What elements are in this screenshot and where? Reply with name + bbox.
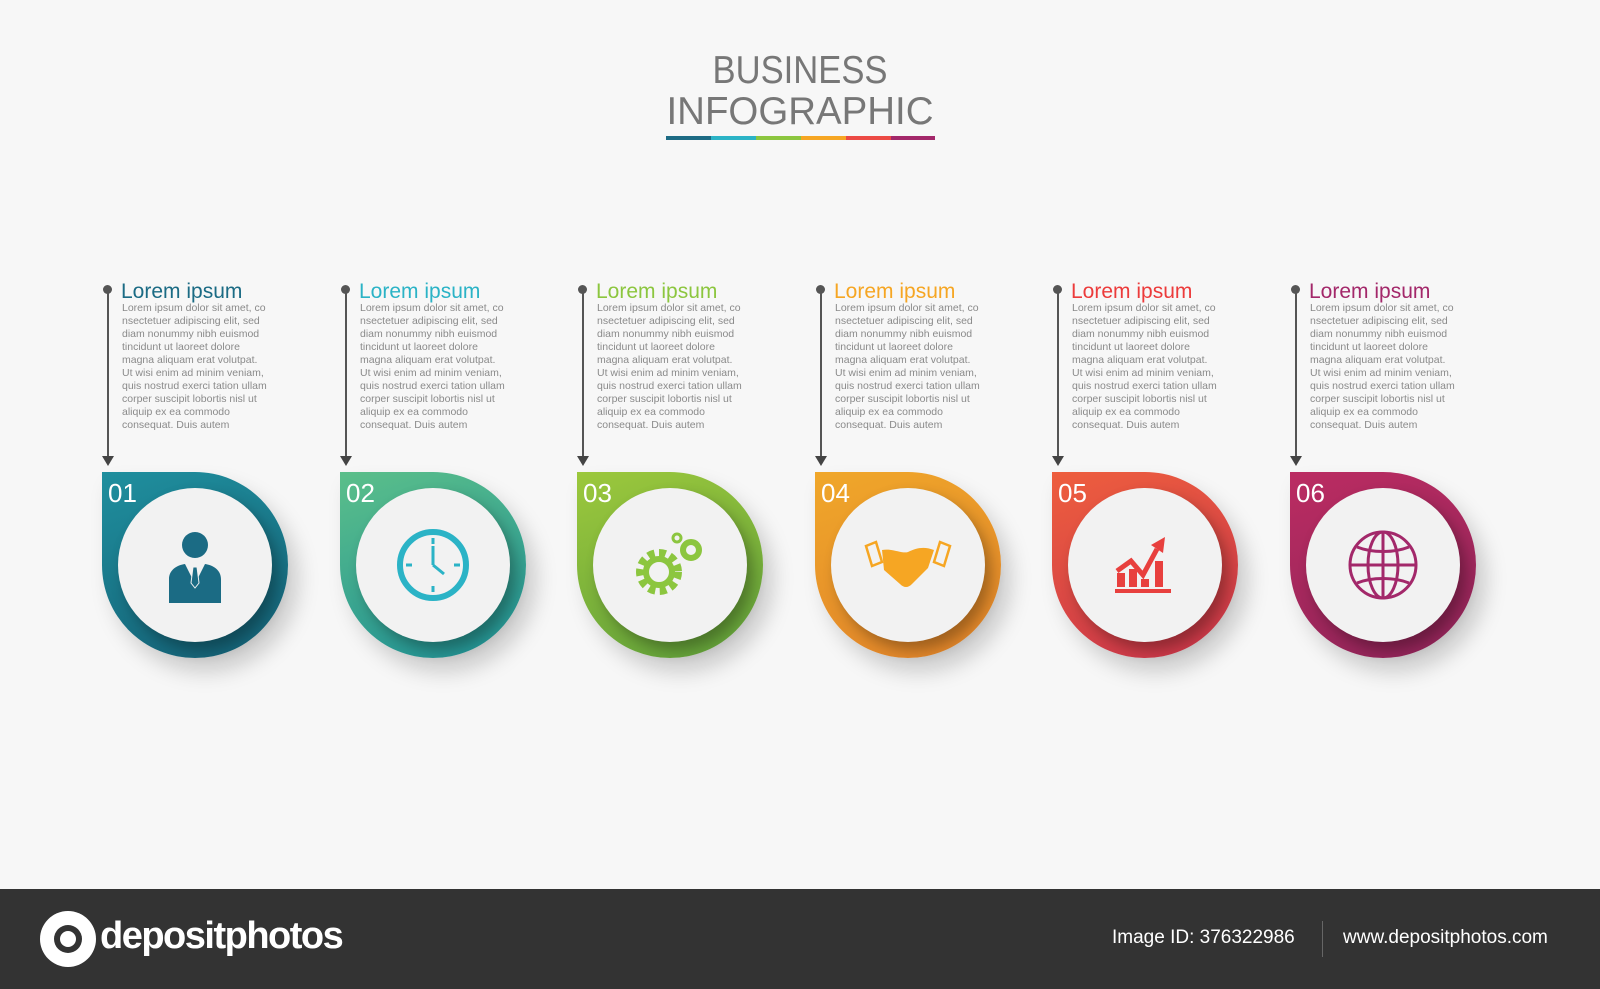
text 01: quis nostrud exerci tation ullam [122,380,267,392]
step 04: 04 [821,478,850,508]
step 01: 01 [108,478,137,508]
text 02: Lorem ipsum dolor sit amet, co [360,302,504,314]
text 03: diam nonummy nibh euismod [597,328,734,340]
icon: gears [593,488,747,642]
badge 03 [577,472,763,658]
icon: clock [356,488,510,642]
text 02 [360,302,505,431]
text 04: nsectetuer adipiscing elit, sed [835,315,973,327]
image id: Image ID: 376322986 [1112,927,1295,948]
text 01: nsectetuer adipiscing elit, sed [122,315,260,327]
icon: handshake [831,488,985,642]
text 05: consequat. Duis autem [1072,419,1179,431]
text 06: Ut wisi enim ad minim veniam, [1310,367,1452,379]
footer bar [0,889,1600,989]
text 06: aliquip ex ea commodo [1310,406,1418,418]
text 02: Ut wisi enim ad minim veniam, [360,367,502,379]
text 05: aliquip ex ea commodo [1072,406,1180,418]
text 05: quis nostrud exerci tation ullam [1072,380,1217,392]
text 03: aliquip ex ea commodo [597,406,705,418]
step 04 [815,280,1020,680]
text 01: magna aliquam erat volutpat. [122,354,257,366]
step 05 [1052,280,1256,680]
heading 02: Lorem ipsum [359,280,480,303]
step 05: 05 [1058,478,1087,508]
text 04: diam nonummy nibh euismod [835,328,972,340]
icon: globe [1306,488,1460,642]
step 06: 06 [1296,478,1325,508]
badge 01 [102,472,288,658]
step 02: 02 [346,478,375,508]
text 03 [597,302,742,431]
text 05: Ut wisi enim ad minim veniam, [1072,367,1214,379]
heading 03: Lorem ipsum [596,280,717,303]
text 04 [835,302,980,431]
icon: chart [1068,488,1222,642]
text 04: quis nostrud exerci tation ullam [835,380,980,392]
text 02: diam nonummy nibh euismod [360,328,497,340]
text 05 [1072,302,1217,431]
text 01: Ut wisi enim ad minim veniam, [122,367,264,379]
text 06: consequat. Duis autem [1310,419,1417,431]
text 06: tincidunt ut laoreet dolore [1310,341,1428,353]
text 05: nsectetuer adipiscing elit, sed [1072,315,1210,327]
text 05: diam nonummy nibh euismod [1072,328,1209,340]
text 06: magna aliquam erat volutpat. [1310,354,1445,366]
step 02 [340,280,544,680]
text 02: nsectetuer adipiscing elit, sed [360,315,498,327]
heading 05: Lorem ipsum [1071,280,1192,303]
text 01 [122,302,267,431]
logo [40,911,96,967]
badge 05 [1052,472,1238,658]
heading 01: Lorem ipsum [121,280,242,303]
text 02: aliquip ex ea commodo [360,406,468,418]
text 04: Lorem ipsum dolor sit amet, co [835,302,979,314]
text 05: corper suscipit lobortis nisl ut [1072,393,1207,405]
text 03: corper suscipit lobortis nisl ut [597,393,732,405]
text 01: aliquip ex ea commodo [122,406,230,418]
text 06: nsectetuer adipiscing elit, sed [1310,315,1448,327]
icon: person [118,488,272,642]
text 01: corper suscipit lobortis nisl ut [122,393,257,405]
title: BUSINESS [712,49,888,92]
footer bar: depositphotos [100,915,342,957]
text 02: magna aliquam erat volutpat. [360,354,495,366]
text 03: consequat. Duis autem [597,419,704,431]
text 02: corper suscipit lobortis nisl ut [360,393,495,405]
text 03: magna aliquam erat volutpat. [597,354,732,366]
text 03: Ut wisi enim ad minim veniam, [597,367,739,379]
step 06 [1290,280,1494,680]
text 03: Lorem ipsum dolor sit amet, co [597,302,741,314]
heading 06: Lorem ipsum [1309,280,1430,303]
text 01: Lorem ipsum dolor sit amet, co [122,302,266,314]
badge 06 [1290,472,1476,658]
text 04: aliquip ex ea commodo [835,406,943,418]
text 05: magna aliquam erat volutpat. [1072,354,1207,366]
text 04: Ut wisi enim ad minim veniam, [835,367,977,379]
text 04: magna aliquam erat volutpat. [835,354,970,366]
title: INFOGRAPHIC [666,90,934,133]
badge 04 [815,472,1001,658]
text 06: diam nonummy nibh euismod [1310,328,1447,340]
text 03: tincidunt ut laoreet dolore [597,341,715,353]
text 01: consequat. Duis autem [122,419,229,431]
title [666,49,935,140]
text 06: quis nostrud exerci tation ullam [1310,380,1455,392]
text 04: consequat. Duis autem [835,419,942,431]
text 06: Lorem ipsum dolor sit amet, co [1310,302,1454,314]
text 02: tincidunt ut laoreet dolore [360,341,478,353]
text 03: quis nostrud exerci tation ullam [597,380,742,392]
text 02: quis nostrud exerci tation ullam [360,380,505,392]
footer bar: www.depositphotos.com [1343,927,1548,948]
text 02: consequat. Duis autem [360,419,467,431]
text 01: diam nonummy nibh euismod [122,328,259,340]
step 01 [102,280,306,680]
badge 02 [340,472,526,658]
text 05: tincidunt ut laoreet dolore [1072,341,1190,353]
text 06 [1310,302,1455,431]
text 06: corper suscipit lobortis nisl ut [1310,393,1445,405]
step 03: 03 [583,478,612,508]
text 05: Lorem ipsum dolor sit amet, co [1072,302,1216,314]
text 03: nsectetuer adipiscing elit, sed [597,315,735,327]
text 04: tincidunt ut laoreet dolore [835,341,953,353]
heading 04: Lorem ipsum [834,280,955,303]
text 01: tincidunt ut laoreet dolore [122,341,240,353]
step 03 [577,280,782,680]
text 04: corper suscipit lobortis nisl ut [835,393,970,405]
